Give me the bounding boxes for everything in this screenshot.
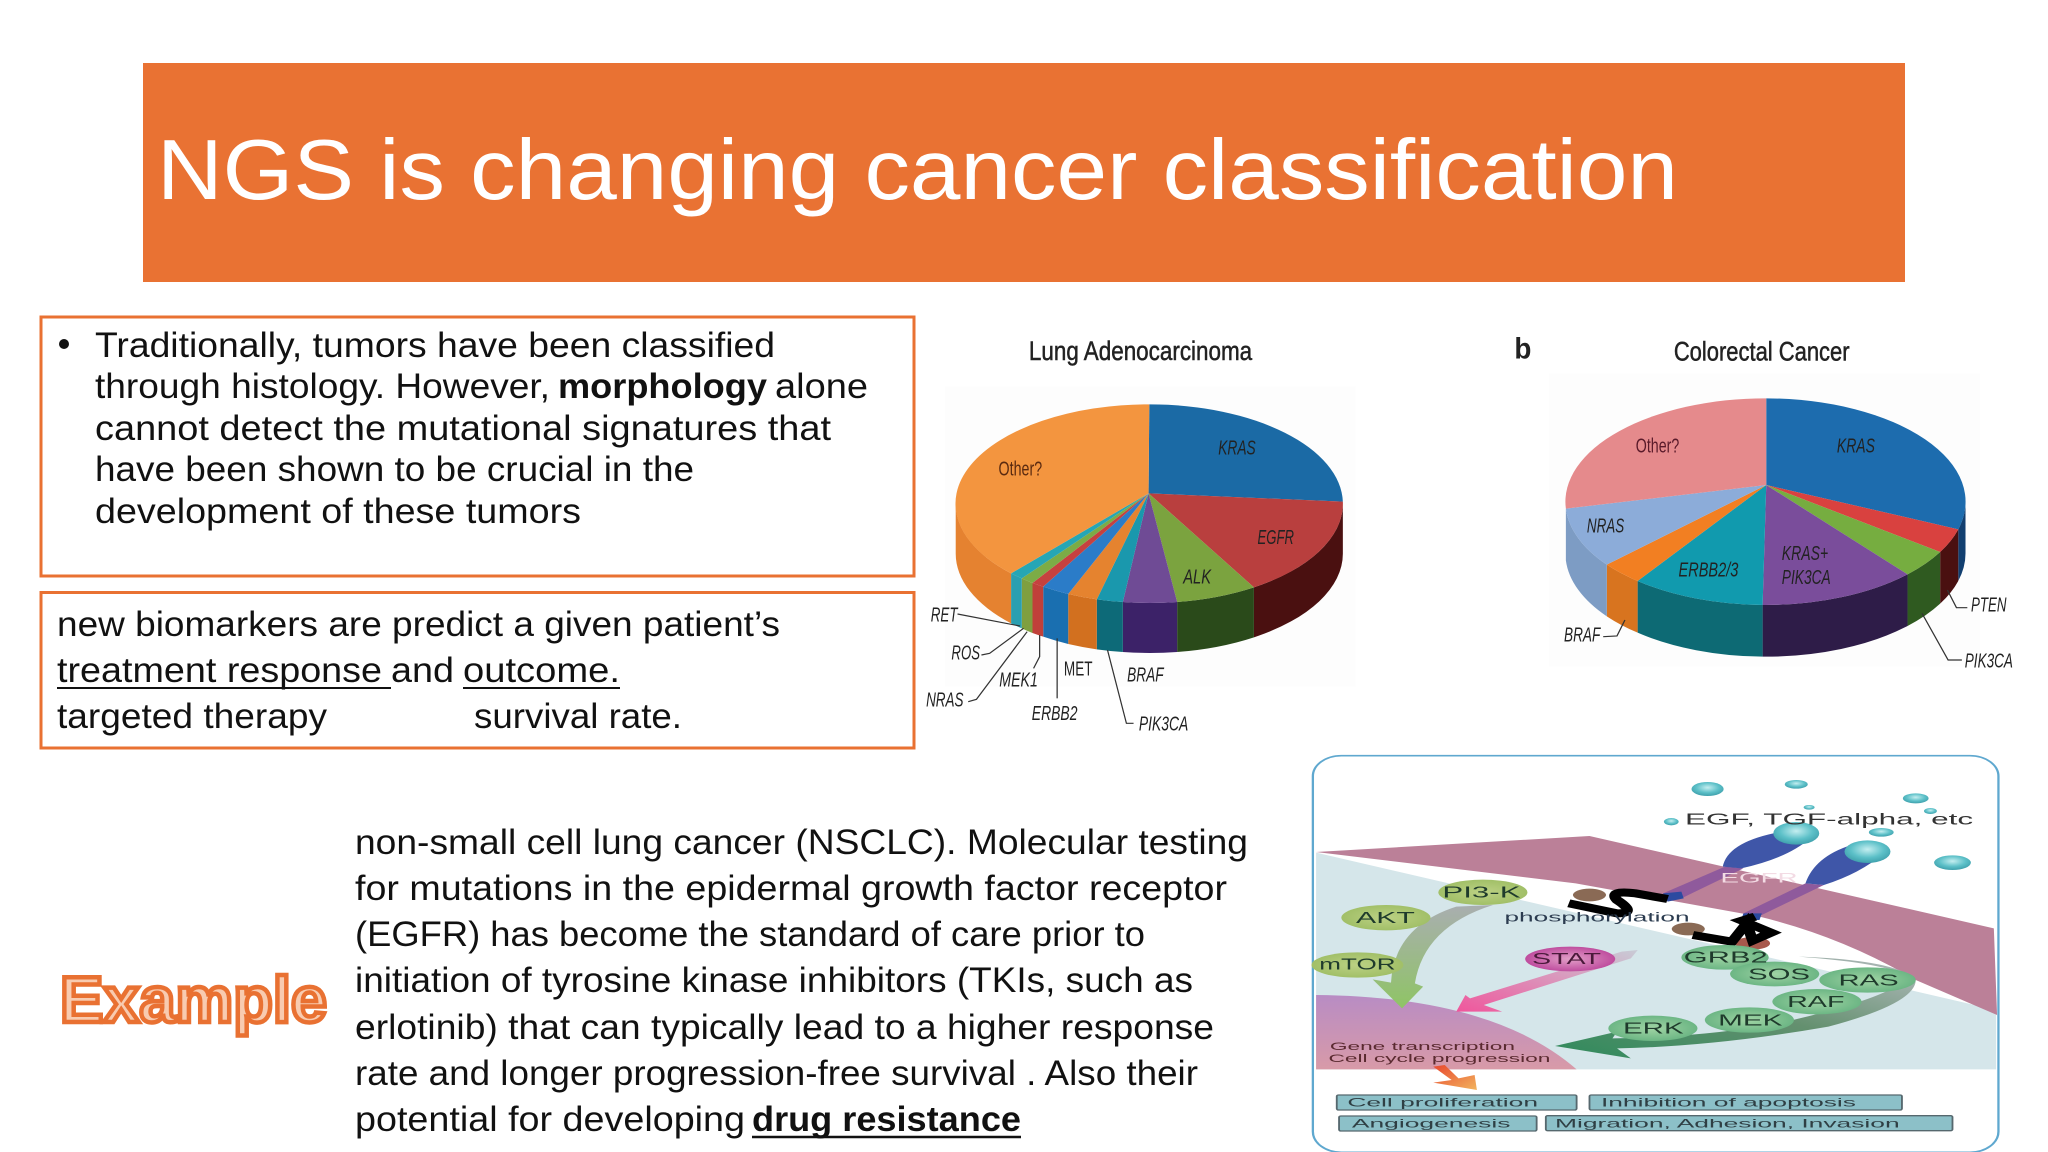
signalling proteins	[1311, 880, 1916, 1041]
cell membrane	[1316, 836, 1997, 1015]
pie labels: MEK1	[999, 669, 1038, 691]
example heading: Example	[60, 963, 327, 1036]
pie labels: Other?	[1636, 435, 1679, 457]
panel letter b: b	[1514, 332, 1531, 365]
text block: NSCLC example: non-small cell lung cancer (NSCLC). Molecular testing	[355, 823, 1248, 862]
signalling proteins: PI3-K	[1442, 884, 1522, 901]
ligand label: EGF, TGF-alpha, etc	[1685, 810, 1973, 828]
text block: NSCLC example: (EGFR) has become the standard of care prior to	[355, 915, 1145, 954]
pie top sectors	[955, 404, 1343, 603]
pie labels: KRAS	[1218, 437, 1256, 459]
pie labels: KRAS+	[1782, 543, 1828, 565]
phosphorylation squiggles	[1569, 889, 1771, 950]
nucleus	[1316, 995, 1577, 1069]
ligand particles	[1664, 780, 1971, 870]
panel: biomarkers text box: and	[391, 651, 454, 690]
nucleus label	[1328, 1040, 1550, 1064]
panel: biomarkers text box	[41, 592, 914, 748]
signalling proteins: GRB2	[1684, 949, 1768, 966]
EGFR receptors	[1663, 822, 1890, 920]
bullet text block: through histology. However,	[95, 367, 550, 406]
signalling proteins: ERK	[1623, 1020, 1685, 1037]
text block: NSCLC example: rate and longer progression-free survival . Also their	[355, 1054, 1198, 1093]
panel: biomarkers text box: outcome.	[463, 651, 620, 690]
outcome boxes: Migration, Adhesion, Invasion	[1555, 1117, 1900, 1131]
signalling proteins: RAF	[1787, 993, 1845, 1010]
chart: lung adenocarcinoma pie	[926, 336, 1356, 735]
signalling proteins: AKT	[1356, 909, 1415, 926]
arrow: STAT to nucleus	[1456, 950, 1638, 1012]
bullet text block: cannot detect the mutational signatures that	[95, 409, 831, 448]
pie labels: ERBB2/3	[1679, 559, 1739, 581]
outcome boxes: Angiogenesis	[1352, 1117, 1510, 1131]
text block: NSCLC example	[355, 823, 1248, 1139]
signalling proteins: STAT	[1532, 950, 1601, 967]
bullet text block: have been shown to be crucial in the	[95, 450, 694, 489]
arrow: PI3-K to nucleus	[1373, 905, 1493, 1008]
pie labels: BRAF	[1127, 664, 1164, 686]
pie labels: ROS	[951, 642, 980, 664]
arrow: nucleus to outcomes	[1433, 1065, 1477, 1090]
text block: NSCLC example: potential for developing	[355, 1100, 745, 1139]
outcome boxes: Inhibition of apoptosis	[1601, 1097, 1856, 1110]
title banner	[143, 63, 1905, 282]
bullet text block: Traditionally, tumors have been classified	[95, 326, 775, 365]
nucleus label: Gene transcription	[1330, 1040, 1515, 1052]
bullet text block	[95, 326, 868, 531]
signalling proteins: MEK	[1718, 1011, 1784, 1029]
signalling proteins: mTOR	[1319, 956, 1396, 973]
pie labels: ALK	[1182, 566, 1212, 588]
pie labels	[1564, 435, 2013, 672]
text block: NSCLC example: initiation of tyrosine kinase inhibitors (TKIs, such as	[355, 961, 1193, 1000]
panel: biomarkers text box: treatment response	[57, 651, 382, 690]
pie labels: PIK3CA	[1782, 567, 1831, 589]
pie labels: Other?	[999, 458, 1042, 480]
pie labels: ERBB2	[1032, 703, 1078, 725]
signalling proteins: RAS	[1839, 971, 1899, 989]
phosphorylation label: phosphorylation	[1504, 911, 1690, 925]
arrow: MAPK cascade to nucleus	[1555, 957, 1916, 1058]
pie top sectors	[1565, 398, 1966, 605]
panel: biomarkers text box: new biomarkers are predict a given patient’s	[57, 605, 780, 644]
pie labels: PIK3CA	[1139, 713, 1188, 735]
pie labels: PIK3CA	[1965, 650, 2013, 672]
bullet text block: alone	[775, 367, 868, 406]
receptor label: EGFR	[1720, 870, 1798, 886]
pie labels: NRAS	[1587, 515, 1624, 537]
pie labels: MET	[1064, 658, 1093, 680]
cytoplasm	[1316, 853, 1996, 1069]
pie leader lines	[957, 614, 1134, 723]
text block: NSCLC example: for mutations in the epidermal growth factor receptor	[355, 869, 1227, 908]
pie leader lines	[1603, 590, 1967, 660]
bullet text block: development of these tumors	[95, 492, 581, 531]
nucleus label: Cell cycle progression	[1328, 1052, 1550, 1064]
bullet text block: morphology	[558, 367, 768, 406]
pie labels: NRAS	[926, 689, 964, 711]
pie labels	[926, 437, 1294, 735]
outcome boxes: Cell proliferation	[1347, 1097, 1538, 1110]
text block: NSCLC example: drug resistance	[752, 1100, 1021, 1139]
chart: colorectal cancer pie	[1514, 332, 2013, 672]
text block: NSCLC example: erlotinib) that can typically lead to a higher response	[355, 1008, 1214, 1047]
pie labels: RET	[931, 604, 958, 626]
diagram: EGFR signalling pathway	[1311, 756, 1998, 1152]
bullet	[59, 339, 69, 349]
pie labels: EGFR	[1257, 527, 1294, 549]
panel: histology text box	[41, 317, 914, 576]
signalling proteins: SOS	[1748, 965, 1810, 983]
chart title: lung adenocarcinoma: Lung Adenocarcinoma	[1029, 336, 1253, 366]
panel: biomarkers text box: targeted therapy	[57, 697, 328, 736]
diagram frame	[1313, 756, 1998, 1152]
pie side wall	[1566, 502, 1966, 657]
outcome boxes	[1337, 1095, 1952, 1131]
pie labels: PTEN	[1971, 594, 2007, 616]
pie side wall	[956, 504, 1343, 653]
pie labels: BRAF	[1564, 624, 1601, 646]
title text: NGS is changing cancer classification	[157, 123, 1678, 218]
panel: biomarkers text box: survival rate.	[474, 697, 682, 736]
pie labels: KRAS	[1837, 435, 1875, 457]
chart title: colorectal cancer: Colorectal Cancer	[1674, 337, 1850, 366]
